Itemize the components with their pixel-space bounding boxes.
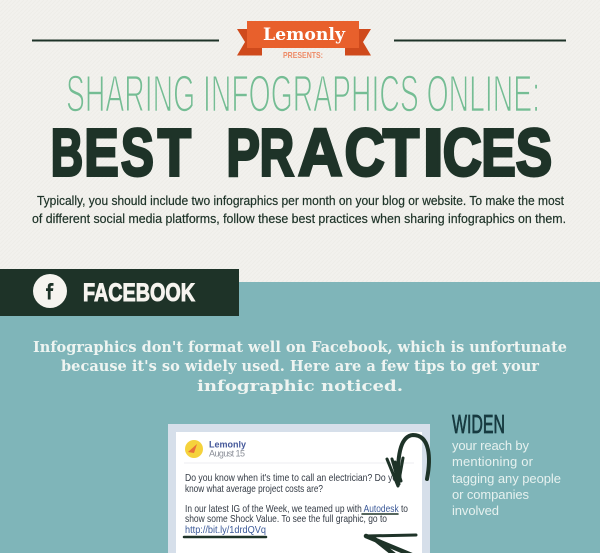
post body: know what average project costs are?	[185, 483, 323, 495]
title line 2: C	[443, 116, 482, 190]
facebook heading: FACEBOOK	[83, 279, 195, 307]
intro text	[32, 194, 566, 226]
widen tip text: or companies	[452, 487, 530, 502]
title line 2: C	[345, 116, 385, 190]
widen tip text: your reach by	[452, 438, 530, 453]
post body: In our latest IG of the Week, we teamed up with Autodesk to	[185, 503, 408, 515]
facebook intro text: infographic noticed.	[197, 377, 403, 395]
post author: Lemonly	[209, 440, 246, 450]
title line 2: E	[481, 116, 516, 190]
post body: http://bit.ly/1drdQVq	[185, 524, 266, 536]
logo ribbon: Lemonly	[263, 25, 346, 45]
icon: facebook circle	[33, 274, 67, 308]
arrow: pointing at link	[366, 535, 416, 553]
intro text: of different social media platforms, follow these best practices when sharing infographics on them.	[32, 212, 566, 226]
title line 2: S	[516, 116, 552, 190]
title line 2	[51, 116, 552, 190]
title line 2: T	[158, 116, 191, 190]
post date: August 15	[209, 448, 245, 458]
facebook header bar	[0, 269, 239, 316]
title line 2: B	[51, 116, 83, 190]
title line 2: E	[84, 116, 119, 190]
title line 2: P	[226, 116, 260, 190]
presents label: PRESENTS:	[283, 50, 323, 60]
widen tip text	[452, 438, 561, 518]
intro text: Typically, you should include two infographics per month on your blog or website. To make the most	[37, 194, 564, 208]
title line 2: I	[422, 116, 444, 190]
widen tip text: tagging any people	[452, 471, 561, 486]
title line 2: T	[383, 116, 419, 190]
title line 2: A	[298, 116, 342, 190]
avatar	[185, 440, 203, 458]
facebook intro text: because it's so widely used. Here are a few tips to get your	[61, 357, 540, 375]
post body: show some Shock Value. To see the full graphic, go to	[185, 513, 387, 525]
facebook intro text: Infographics don't format well on Facebook, which is unfortunate	[33, 338, 567, 356]
facebook post screenshot	[168, 424, 430, 553]
title line 2: S	[121, 116, 154, 190]
post body	[185, 472, 408, 536]
widen tip text: mentioning or	[452, 454, 534, 469]
title line 2: R	[260, 116, 294, 190]
post body: Do you know when it's time to call an electrician? Do you	[185, 472, 402, 484]
logo ribbon	[237, 21, 371, 56]
widen tip heading: WIDEN	[452, 409, 505, 439]
facebook intro text	[33, 338, 567, 395]
widen tip text: involved	[452, 503, 499, 518]
arrow: curved arrow to mention	[387, 435, 429, 486]
hand-drawn underlines	[184, 514, 398, 537]
